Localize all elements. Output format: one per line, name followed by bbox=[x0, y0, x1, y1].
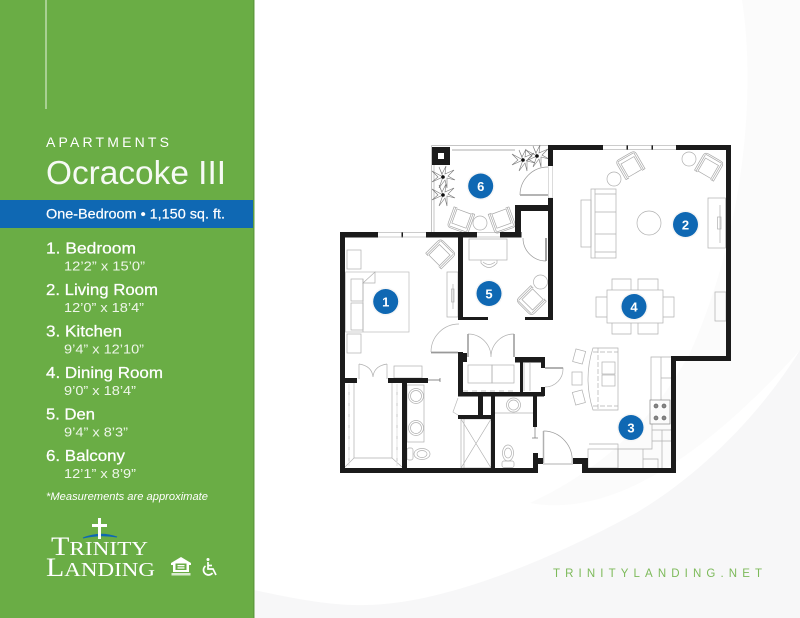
walls bbox=[340, 145, 731, 473]
room 6: 12’1” x 8’9” bbox=[64, 467, 136, 481]
website address: TRINITYLANDING.NET bbox=[553, 568, 762, 580]
den armchair bbox=[516, 286, 546, 316]
room 3 bbox=[46, 324, 144, 356]
blue band: unit type and size bbox=[0, 200, 253, 228]
room 3: 3. Kitchen bbox=[46, 324, 122, 340]
bar stools bbox=[573, 349, 586, 364]
marker 4: 4 bbox=[630, 300, 638, 314]
marker 5 bbox=[475, 280, 503, 308]
sofa bbox=[591, 189, 616, 258]
laundry bbox=[468, 365, 492, 383]
floor plan bbox=[340, 145, 731, 473]
closet double doors bbox=[359, 364, 387, 379]
living room armchairs bbox=[615, 150, 645, 180]
shower bbox=[461, 419, 491, 468]
balcony planter bbox=[432, 147, 450, 165]
kitchen counters bbox=[651, 357, 671, 400]
den door bbox=[523, 238, 546, 261]
room 2: 12’0” x 18’4” bbox=[64, 301, 144, 315]
balcony door bbox=[520, 167, 548, 195]
room 4: 4. Dining Room bbox=[46, 365, 163, 382]
logo: Trinity Landing bbox=[46, 518, 155, 582]
room 2: 2. Living Room bbox=[46, 282, 158, 299]
marker 4 bbox=[620, 292, 648, 320]
coffee table bbox=[637, 211, 661, 235]
bedroom closet bbox=[345, 383, 402, 467]
marker 1: 1 bbox=[382, 294, 389, 310]
room list bbox=[46, 240, 163, 481]
room 4 bbox=[46, 365, 163, 398]
storage closet shelves bbox=[524, 363, 530, 391]
room 5: 5. Den bbox=[46, 406, 95, 424]
icon: equal housing bbox=[171, 557, 191, 576]
marker 2: 2 bbox=[682, 218, 689, 232]
blue band: unit type and size: One-Bedroom • 1,150 sq. ft. bbox=[46, 206, 225, 222]
marker 6: 6 bbox=[477, 179, 484, 194]
stove bbox=[650, 400, 670, 424]
room 6 bbox=[46, 448, 136, 481]
entry door bbox=[543, 431, 573, 464]
logo: Trinity Landing: LANDING bbox=[46, 553, 155, 582]
bath door bbox=[453, 398, 458, 415]
window mullions bbox=[402, 232, 403, 238]
toilet bbox=[407, 448, 413, 460]
marker 3: 3 bbox=[627, 420, 635, 436]
balcony plants bbox=[432, 166, 455, 188]
room 2 bbox=[46, 282, 158, 315]
kitchen island bbox=[588, 348, 618, 410]
marker 2 bbox=[672, 210, 700, 238]
bedroom door bbox=[431, 324, 459, 352]
title: Ocracoke III: Ocracoke III bbox=[46, 154, 226, 191]
bedroom armchair bbox=[426, 238, 456, 269]
storage door bbox=[545, 368, 563, 387]
logo: Trinity Landing: TRINITY bbox=[51, 532, 148, 561]
room 5: 9’4” x 8’3” bbox=[64, 426, 128, 440]
closet rod bbox=[428, 378, 440, 382]
den desk bbox=[469, 239, 507, 260]
bedroom dresser bbox=[447, 272, 458, 317]
marker 1 bbox=[372, 288, 400, 316]
panel: green sidebar bbox=[0, 0, 254, 618]
bed bbox=[346, 272, 409, 332]
background swoosh: lower grey bbox=[254, 350, 800, 618]
marker 3 bbox=[617, 414, 645, 442]
furniture and fixtures bbox=[345, 145, 726, 468]
room 1: 12’2” x 15’0” bbox=[64, 260, 145, 274]
room 4: 9’0” x 18’4” bbox=[64, 384, 136, 398]
marker 5: 5 bbox=[485, 286, 493, 302]
balcony chairs bbox=[447, 207, 475, 234]
room 5 bbox=[46, 406, 128, 440]
second bath bbox=[495, 412, 533, 414]
balcony table bbox=[473, 216, 487, 230]
room 1: 1. Bedroom bbox=[46, 240, 136, 258]
living room media unit bbox=[708, 198, 726, 248]
icon: wheelchair access bbox=[203, 558, 216, 575]
dining table and chairs bbox=[607, 290, 663, 323]
background swoosh: light band bbox=[530, 0, 800, 505]
den double doors bbox=[468, 334, 514, 357]
footnote: *Measurements are approximate bbox=[46, 491, 208, 503]
room 1 bbox=[46, 240, 145, 274]
windows bbox=[378, 146, 676, 237]
room 6: 6. Balcony bbox=[46, 448, 125, 465]
eyebrow: apartments: APARTMENTS bbox=[46, 134, 169, 150]
room 3: 9’4” x 12’10” bbox=[64, 342, 144, 356]
marker 6 bbox=[467, 172, 495, 200]
balcony railing bbox=[432, 146, 548, 232]
decorative vertical line bbox=[46, 0, 47, 109]
vanity and sinks bbox=[407, 385, 424, 442]
